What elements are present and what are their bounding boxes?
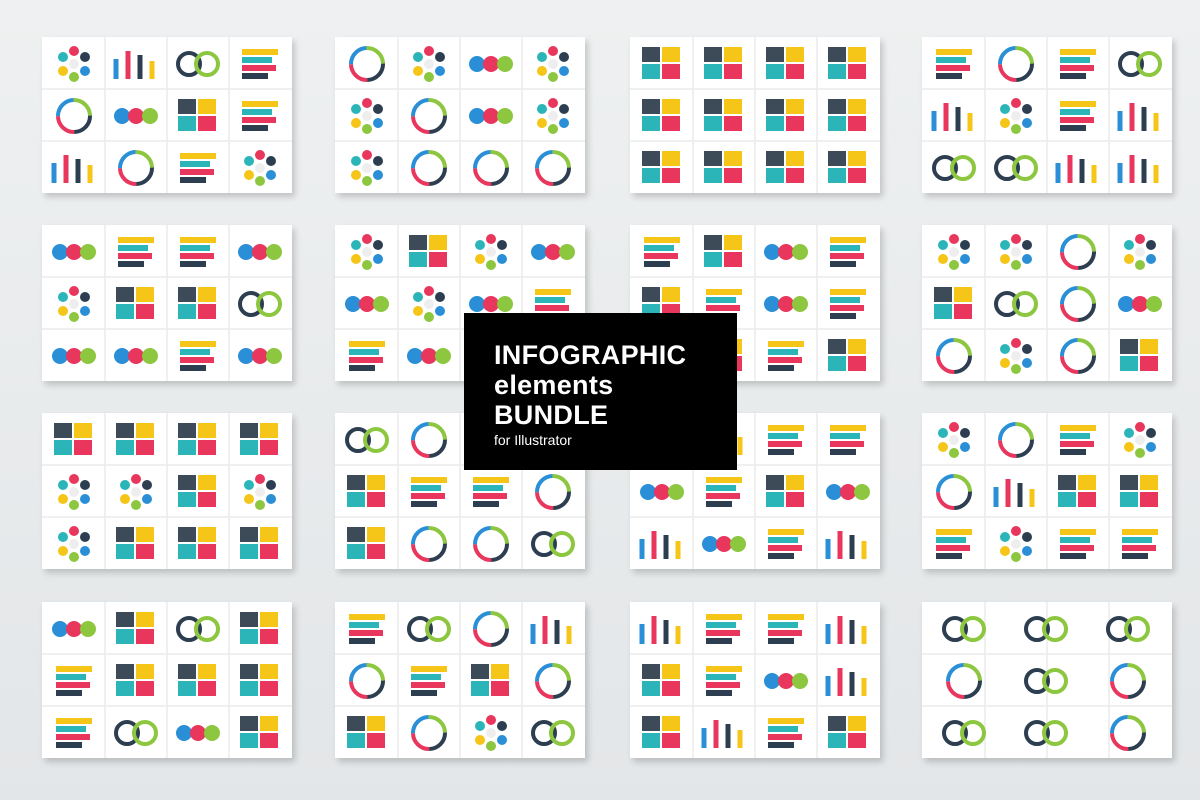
card: row1 col3	[630, 37, 880, 193]
title box	[464, 313, 737, 470]
card: row2 col2	[335, 225, 585, 381]
card: row4 col4	[922, 602, 1172, 758]
card: row1 col2	[335, 37, 585, 193]
card: row3 col2	[335, 413, 585, 569]
card: row3 col3	[630, 413, 880, 569]
card: row2 col1	[42, 225, 292, 381]
subtitle: for Illustrator	[494, 432, 572, 448]
card: row4 col1	[42, 602, 292, 758]
title: line 3: BUNDLE	[494, 400, 608, 430]
title: line 1: INFOGRAPHIC	[494, 340, 686, 370]
card: row4 col2	[335, 602, 585, 758]
card: row3 col4	[922, 413, 1172, 569]
title: line 2: elements	[494, 370, 613, 400]
card: row4 col3	[630, 602, 880, 758]
card: row2 col4	[922, 225, 1172, 381]
card: row3 col1	[42, 413, 292, 569]
card: row2 col3	[630, 225, 880, 381]
card: row1 col4	[922, 37, 1172, 193]
card: row1 col1	[42, 37, 292, 193]
